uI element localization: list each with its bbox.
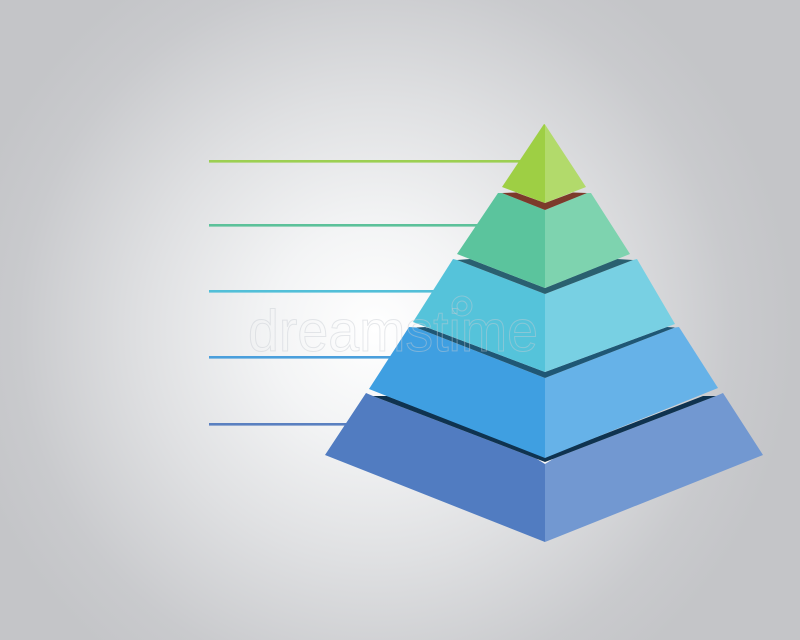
leader line: tier 2: [209, 224, 489, 227]
leader line: tier 1: [209, 160, 529, 163]
tier 4: [369, 327, 718, 458]
tier 5: base: [325, 393, 763, 542]
leader line: tier 5: [209, 423, 359, 426]
tier 1: apex: [502, 124, 586, 203]
leader line: tier 3: [209, 290, 444, 293]
watermark: dreamstime: [248, 299, 538, 364]
tier 2: [457, 192, 630, 288]
leader line: tier 4: [209, 356, 399, 359]
tier 3: [413, 259, 675, 372]
pyramid: [325, 124, 763, 542]
